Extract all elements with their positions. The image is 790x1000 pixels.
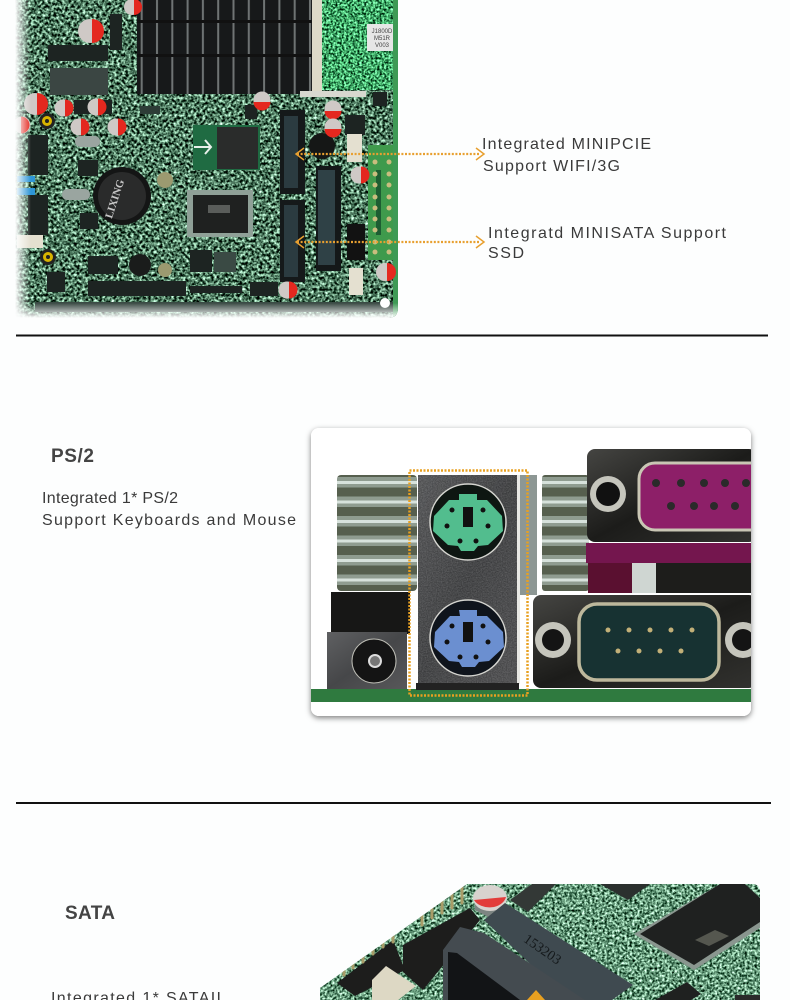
photo: motherboard top bbox=[14, 0, 398, 318]
heatsink stripes left bbox=[337, 475, 417, 591]
text: minisata callout: Integratd MINISATA Support bbox=[488, 225, 727, 242]
green board strip bbox=[311, 689, 751, 702]
photo: SATA board bbox=[320, 884, 760, 1000]
white connectors bbox=[17, 134, 363, 295]
main chip bbox=[187, 190, 253, 237]
coin battery: LIXING bbox=[103, 178, 127, 220]
heading: SATA: SATA bbox=[65, 903, 115, 924]
minipcie connector bbox=[443, 903, 633, 1000]
serial port bbox=[533, 595, 761, 688]
green header bbox=[368, 0, 398, 318]
arrow: minisata callout bbox=[296, 236, 484, 248]
green pcb area top right bbox=[322, 0, 398, 90]
blue connectors bbox=[17, 176, 35, 195]
text: PS/2 description: Integrated 1* PS/2 bbox=[42, 490, 178, 507]
sim socket bbox=[193, 125, 260, 170]
dark chips bbox=[28, 14, 395, 312]
text: minisata callout: SSD bbox=[488, 245, 524, 262]
green pcb area top right: J1800D bbox=[372, 29, 393, 35]
arrow: minipcie callout bbox=[296, 148, 484, 160]
minipcie sockets bbox=[280, 110, 305, 282]
PS/2 blue port bbox=[430, 600, 506, 676]
PS/2 metal shield bbox=[416, 475, 520, 690]
small chip bbox=[214, 252, 236, 272]
large chip bbox=[634, 884, 760, 970]
photo: PS/2 ports bbox=[311, 428, 769, 716]
coin battery bbox=[93, 167, 151, 225]
text: PS/2 description: Support Keyboards and Mouse bbox=[42, 512, 296, 529]
black fins bbox=[656, 563, 751, 593]
purple bar bbox=[586, 543, 751, 563]
pin headers bbox=[337, 885, 480, 996]
heatsink stripes right bbox=[542, 475, 589, 591]
heatsink bbox=[137, 0, 312, 94]
white connector bbox=[372, 966, 416, 1000]
arrow tip bbox=[527, 990, 545, 1000]
text: minipcie callout: Integrated MINIPCIE bbox=[482, 136, 651, 153]
heading: PS/2: PS/2 bbox=[51, 446, 94, 467]
PS/2 green port bbox=[430, 484, 506, 560]
text: minipcie callout: Support WIFI/3G bbox=[483, 158, 620, 175]
power jack bbox=[327, 592, 410, 689]
text: minisata callout bbox=[488, 225, 727, 262]
green pcb area top right: V003 bbox=[375, 43, 390, 49]
minipcie connector: 153203 bbox=[521, 932, 564, 968]
parallel port bbox=[587, 449, 769, 542]
capacitors bbox=[14, 0, 396, 298]
memory slot bbox=[312, 0, 322, 97]
text: minipcie callout bbox=[482, 136, 651, 175]
crystals bbox=[75, 136, 100, 147]
green pcb area top right: M51R bbox=[374, 36, 391, 42]
minisata socket bbox=[309, 133, 365, 271]
text: PS/2 description bbox=[42, 490, 296, 529]
dotted highlight box bbox=[410, 470, 528, 696]
yellow jacks bbox=[39, 113, 56, 265]
small chips bbox=[510, 884, 760, 1000]
capacitor bbox=[473, 885, 507, 918]
